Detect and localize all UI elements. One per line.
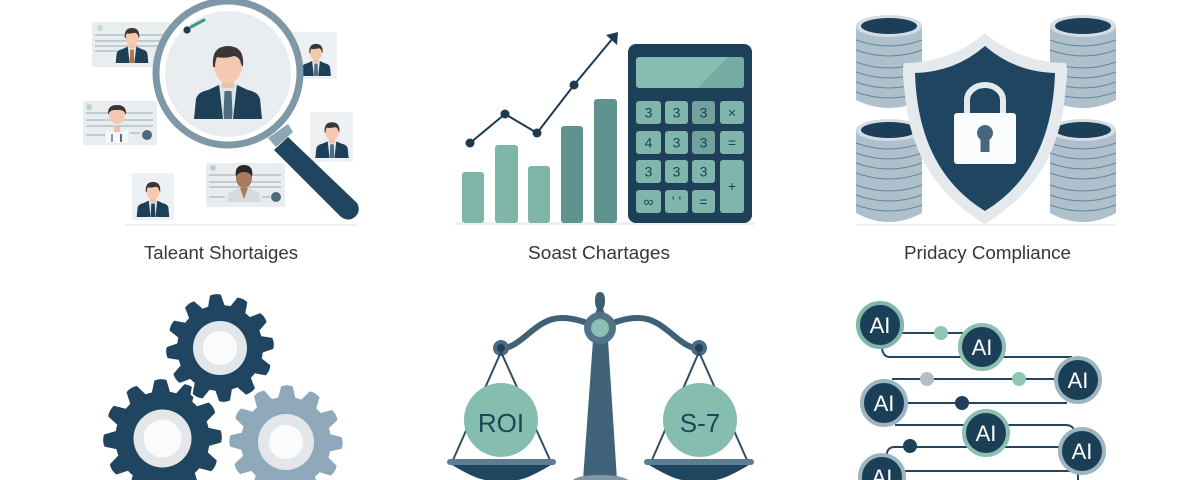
- bar chart: [462, 99, 617, 223]
- icon: calculator: 3: [673, 104, 681, 120]
- icon: shield with padlock: [903, 33, 1067, 224]
- icon: calculator: 3: [645, 104, 653, 120]
- icon: calculator: =: [699, 194, 708, 210]
- panel: privacy compliance: [856, 15, 1116, 263]
- AI nodes: AI: [972, 335, 992, 360]
- connector lines: [882, 333, 1078, 480]
- AI nodes: [858, 303, 1104, 480]
- AI nodes: AI: [1072, 439, 1092, 464]
- label: cost charts: Soast Chartages: [528, 243, 670, 263]
- icon: database cylinders: [856, 15, 1116, 222]
- icon: calculator: ×: [728, 104, 736, 120]
- panel: balance scale: [447, 292, 754, 480]
- label: privacy compliance: Pridacy Compliance: [904, 243, 1071, 263]
- icon: calculator: +: [728, 178, 736, 194]
- connector nodes: [903, 326, 1026, 453]
- icon: scale beam: [493, 312, 707, 356]
- AI nodes: AI: [976, 421, 996, 446]
- icon: calculator: ∞: [644, 194, 654, 210]
- panel: AI network: [858, 303, 1104, 480]
- icon: dark gear lower left: [101, 377, 224, 480]
- baseline: [856, 224, 1116, 226]
- AI nodes: AI: [874, 391, 894, 416]
- card: candidate middle left: [83, 101, 157, 145]
- icon: calculator: [628, 44, 752, 223]
- left pan with ROI: ROI: [478, 408, 524, 438]
- panel: gears: [101, 289, 344, 480]
- baseline: [125, 224, 357, 226]
- card: portrait top right: [293, 32, 337, 79]
- icon: calculator: 3: [700, 104, 708, 120]
- icon: calculator: =: [728, 134, 736, 150]
- icon: grey gear right: [228, 384, 344, 480]
- icon: calculator: 4: [645, 134, 653, 150]
- AI nodes: AI: [870, 313, 890, 338]
- icon: scale stand: [573, 292, 628, 480]
- panel: talent shortages: [83, 1, 359, 263]
- right pan with S-7: S-7: [680, 408, 720, 438]
- icon: dark gear top: [161, 289, 279, 407]
- icon: calculator: 3: [700, 164, 708, 180]
- left pan with ROI: [447, 352, 556, 480]
- AI nodes: AI: [1068, 368, 1088, 393]
- right pan with S-7: [644, 352, 754, 480]
- card: candidate bottom: [206, 163, 285, 207]
- card: candidate top left: [92, 22, 170, 67]
- panel: cost charts: [455, 32, 755, 263]
- icon: calculator: 3: [645, 164, 653, 180]
- label: talent shortages: Taleant Shortaiges: [144, 243, 298, 263]
- icon: calculator: 3: [673, 164, 681, 180]
- icon: magnifying glass: [156, 1, 359, 220]
- card: portrait middle right: [310, 112, 353, 162]
- icon: calculator: 3: [673, 134, 681, 150]
- icon: calculator: ' ': [672, 193, 681, 209]
- line chart with arrow: [466, 32, 618, 148]
- baseline: [455, 222, 755, 225]
- card: portrait bottom left: [132, 173, 174, 220]
- icon: calculator: 3: [700, 134, 708, 150]
